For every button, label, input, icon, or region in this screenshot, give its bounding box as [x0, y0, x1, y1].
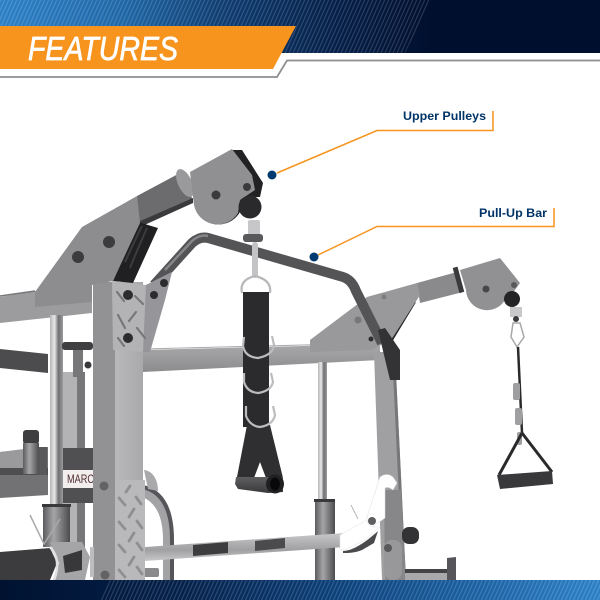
arm collar — [172, 166, 198, 200]
ball stop — [238, 196, 262, 218]
rear horizontal beams — [0, 291, 380, 373]
MARCY label: MARC — [67, 472, 94, 486]
right cable and stirrup handle — [497, 307, 553, 489]
carabiner — [243, 220, 263, 278]
pull-up bar — [154, 236, 400, 380]
upper left pulley head — [172, 149, 263, 224]
strap — [237, 292, 283, 478]
left collar and weight sleeve — [0, 542, 94, 580]
leader line — [277, 111, 493, 173]
label: Upper Pulleys — [403, 109, 486, 123]
weight storage shelf and peg — [0, 430, 94, 503]
marker dot — [268, 170, 276, 180]
leader line — [318, 208, 554, 255]
floor bracket — [405, 557, 456, 580]
right carabiner — [510, 307, 524, 347]
header banner — [0, 0, 600, 77]
left cable attachment — [235, 220, 284, 494]
footer banner — [0, 580, 600, 600]
pulley rim — [198, 150, 263, 224]
callout: Pull-Up Bar — [310, 206, 554, 262]
stirrup — [499, 433, 552, 475]
cable — [513, 347, 522, 445]
right rear guide rod and sleeve — [314, 362, 335, 580]
upper diamond plate bracket — [112, 272, 172, 352]
orange title ribbon — [0, 26, 296, 69]
left rear upright and guide rod — [50, 315, 94, 553]
callout: Upper Pulleys — [268, 109, 493, 180]
right front column — [374, 352, 419, 580]
side plate — [190, 149, 255, 224]
marker dot — [310, 252, 318, 262]
barbell hook — [340, 474, 397, 553]
left gusset plate — [35, 196, 140, 307]
header white and gray rule — [0, 60, 600, 77]
lower D-rings — [243, 336, 275, 427]
left front column — [93, 282, 143, 580]
left guide sleeve and spring clip — [30, 504, 71, 547]
lower diamond plate — [116, 480, 145, 580]
right gusset and arm — [310, 272, 463, 352]
padded handle — [235, 474, 284, 494]
barbell — [145, 533, 345, 561]
striped blue header background — [0, 0, 600, 53]
upper left arm — [113, 173, 193, 283]
title: FEATURES — [28, 30, 178, 67]
stirrup grip — [497, 471, 553, 489]
right pulley head — [453, 258, 520, 310]
curved plate behind front column — [143, 470, 172, 580]
label: Pull-Up Bar — [479, 206, 547, 220]
top D-ring — [242, 276, 270, 293]
gym machine illustration — [0, 149, 553, 580]
